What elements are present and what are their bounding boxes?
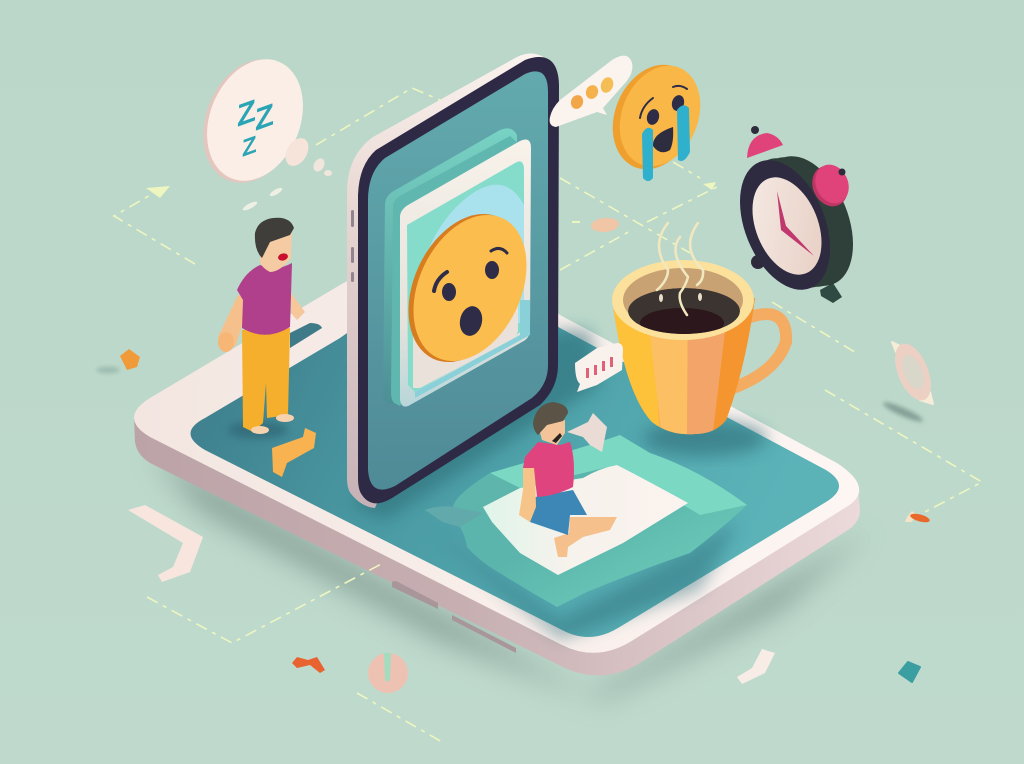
fin (425, 506, 483, 527)
phone frame (358, 57, 559, 503)
coffee mug (605, 223, 786, 456)
hair (255, 218, 294, 258)
ring (722, 147, 848, 303)
ZZZ text: Z (242, 131, 257, 163)
isometric illustration (96, 54, 980, 742)
inner wall (623, 268, 743, 332)
standing man (218, 218, 305, 439)
hand (218, 332, 234, 352)
head (260, 226, 292, 272)
arms (218, 295, 250, 352)
side switches (351, 210, 354, 282)
floating ring right (881, 339, 938, 425)
ZZZ text: Z (237, 92, 256, 134)
crying emoji (598, 52, 715, 182)
hands (777, 191, 814, 256)
screen (190, 260, 839, 637)
right bell (806, 160, 854, 212)
feet (251, 426, 269, 434)
blanket (425, 435, 747, 607)
handle (733, 314, 786, 388)
side buttons (392, 581, 516, 653)
sheet (483, 465, 688, 575)
foot (820, 283, 842, 303)
legs (242, 328, 290, 432)
orange cube left (96, 349, 140, 374)
ZZZ text: Z (255, 96, 274, 138)
blanket shadow (430, 520, 740, 640)
platform shadow (150, 450, 870, 700)
left bell (747, 133, 783, 158)
chat bubble with dots (550, 56, 632, 127)
ZZZ text (237, 92, 274, 163)
body (730, 143, 871, 301)
dashed guide lines (114, 88, 982, 742)
exclamation marks (586, 357, 613, 378)
torso (523, 442, 574, 497)
tears (642, 128, 653, 181)
sleep speech bubble (185, 44, 332, 212)
shadow (228, 421, 288, 439)
slot on platform (290, 323, 322, 348)
platform top (134, 225, 859, 653)
mouth (277, 252, 289, 262)
upright phone shadow on screen (350, 330, 600, 520)
shorts (530, 490, 587, 535)
bottom dashed guide (147, 563, 383, 643)
alarm clock (722, 126, 871, 303)
face (739, 167, 835, 285)
platform side (134, 418, 860, 676)
teal block (899, 662, 920, 682)
bottom scraps (292, 511, 931, 693)
orange chip (905, 511, 916, 522)
upright phone (347, 53, 559, 508)
coffee (628, 288, 740, 338)
small pill (590, 217, 620, 233)
mouth (653, 127, 673, 152)
body stripes (612, 298, 755, 434)
tissue (567, 413, 607, 452)
head (538, 420, 565, 445)
mustache (552, 433, 562, 443)
surprised emoji (386, 195, 549, 381)
phone side edge (347, 53, 550, 508)
mattress blanket (425, 435, 747, 607)
leg (554, 517, 617, 557)
orange block under man (272, 428, 316, 477)
phone screen (368, 71, 548, 490)
sitting man (519, 402, 617, 557)
steam (657, 223, 703, 315)
white scrap (737, 649, 775, 684)
arm (519, 468, 536, 522)
mug shadow (643, 420, 767, 456)
small chat bubble (575, 343, 623, 392)
orange scrap (292, 657, 325, 673)
arrowheads (146, 182, 716, 223)
white chevron (128, 505, 203, 582)
rim (612, 260, 754, 340)
peach disc (368, 653, 408, 693)
shirt (237, 263, 292, 335)
stacked cards (383, 128, 531, 407)
light top band (490, 435, 747, 515)
platform phone (134, 225, 860, 676)
hair (533, 402, 568, 435)
